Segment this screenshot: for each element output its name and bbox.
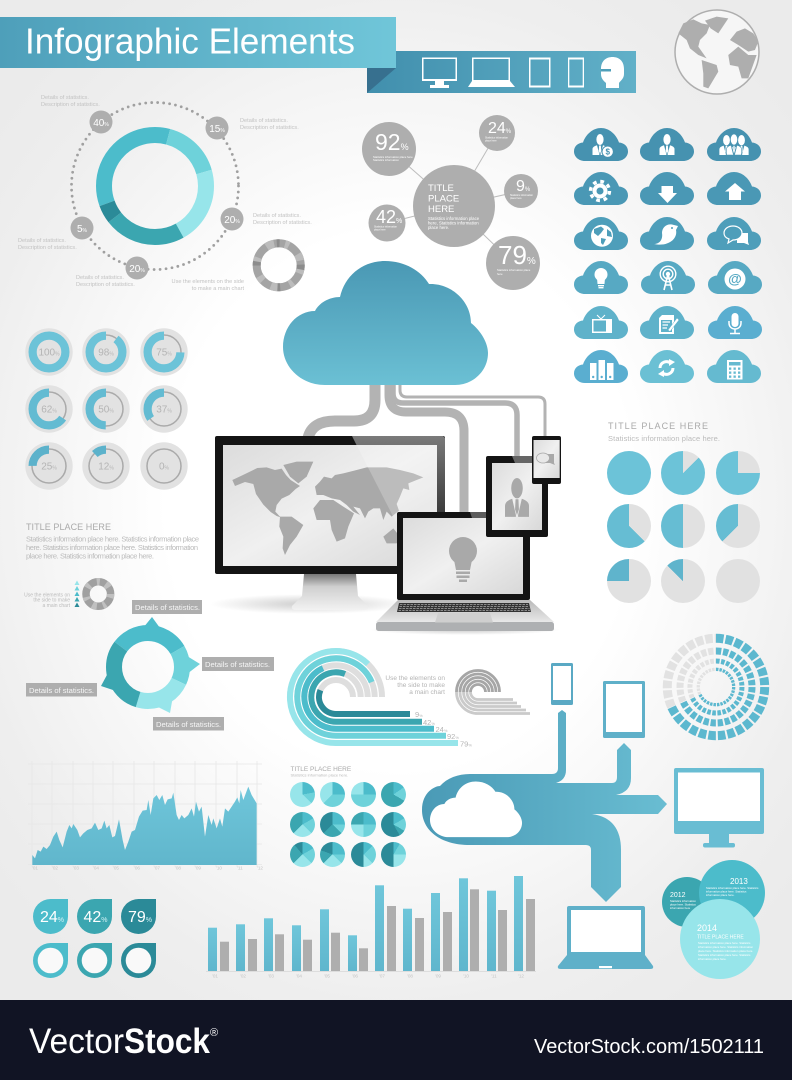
footer bar: Vector xyxy=(29,1022,124,1061)
bubble chart: here xyxy=(497,272,503,276)
light bulb icon xyxy=(449,537,477,582)
bar chart: '11 xyxy=(491,974,497,978)
small pies title: TITLE PLACE HERE xyxy=(290,766,352,773)
bubble chart: Statistics information xyxy=(485,136,509,140)
bubble chart: HERE xyxy=(428,204,454,215)
bubble chart: here, Statistics information xyxy=(428,220,479,226)
main donut chart with dotted ring: Description of statistics. xyxy=(18,245,77,251)
main donut chart with dotted ring: Details of statistics. xyxy=(41,95,89,101)
main donut chart with dotted ring: Description of statistics. xyxy=(240,125,299,131)
cloud: notes xyxy=(640,306,694,339)
progress ring 0: 0% xyxy=(159,462,170,472)
cloud: light bulb xyxy=(574,261,628,294)
cloud: at sign: @ xyxy=(728,270,742,286)
year circles: 2013 xyxy=(730,877,748,886)
cloud: calculator xyxy=(707,350,761,383)
bubble chart: place here xyxy=(374,228,386,232)
semicircular bar chart: 9% xyxy=(415,710,423,719)
small grey semicircle bars xyxy=(456,670,530,714)
world map xyxy=(232,462,423,555)
area chart: '06 xyxy=(134,866,140,870)
cloud: team xyxy=(707,128,761,161)
semicircular bar chart xyxy=(290,651,472,748)
bubble chart: 92% xyxy=(375,129,409,155)
desktop monitor xyxy=(210,436,445,614)
bar chart: '07 xyxy=(379,974,385,978)
progress ring 37 xyxy=(140,385,188,433)
bubble chart: TITLE xyxy=(428,183,454,194)
cloud: binders xyxy=(574,350,628,383)
footer bar: VectorStock.com/1502111 xyxy=(534,1036,764,1058)
main donut chart with dotted ring: 20% xyxy=(224,215,240,226)
bar chart: '10 xyxy=(463,974,469,978)
cloud: person with dollar xyxy=(574,128,628,161)
progress ring 25: 25% xyxy=(41,462,57,472)
bar chart: '02 xyxy=(240,974,246,978)
bubble chart: PLACE xyxy=(428,194,459,204)
cloud: upload arrow xyxy=(707,172,761,205)
year circles: Statistics information xyxy=(670,899,696,903)
bar chart: '03 xyxy=(268,974,274,978)
title: Infographic Elements xyxy=(25,20,355,62)
year circles: information place here. Statistics information xyxy=(698,945,753,949)
area chart: '04 xyxy=(93,866,99,870)
area chart: '11 xyxy=(237,866,243,870)
bubble chart: Statistics information xyxy=(373,158,399,162)
progress ring 25 xyxy=(25,442,73,490)
main donut chart with dotted ring: 40% xyxy=(93,118,109,129)
progress ring 100: 100% xyxy=(38,348,60,358)
main donut chart with dotted ring: Details of statistics. xyxy=(240,118,288,124)
main donut chart with dotted ring xyxy=(18,95,312,292)
bubble chart: Statistics information place here xyxy=(373,155,413,159)
bubble chart: 79% xyxy=(498,240,536,270)
progress ring 98 xyxy=(82,328,130,376)
outline laptop xyxy=(558,906,653,969)
white cloud xyxy=(430,782,522,837)
semicircular bar chart: the side to make xyxy=(397,682,445,689)
year circles: information place here. Statistics xyxy=(706,890,747,894)
progress ring 75 xyxy=(140,328,188,376)
small ring with triangles: a main chart xyxy=(42,603,71,609)
year circles: 2014 xyxy=(697,923,717,933)
year circles: Statistics information place here. Statistics xyxy=(698,953,751,957)
bar chart: '06 xyxy=(352,974,358,978)
main donut chart with dotted ring: to make a main chart xyxy=(192,286,244,292)
bar chart: '01 xyxy=(212,974,218,978)
cloud tree diagram xyxy=(422,710,667,902)
cloud: gear xyxy=(574,172,628,205)
cloud icon grid xyxy=(574,128,762,383)
main donut chart with dotted ring: Description of statistics. xyxy=(76,282,135,288)
semicircular bar chart: Use the elements on xyxy=(385,675,445,682)
pies title right xyxy=(608,421,720,443)
cloud: microphone xyxy=(708,306,762,339)
footer bar: Stock xyxy=(124,1022,210,1061)
progress ring 0 xyxy=(140,442,188,490)
area chart: '01 xyxy=(32,866,38,870)
progress ring 98: 98% xyxy=(98,348,114,358)
area chart: '10 xyxy=(216,866,222,870)
year circles: 2012 xyxy=(670,892,686,899)
year circles xyxy=(662,860,765,979)
outline tablet xyxy=(603,681,645,738)
small pies title: Statistics information place here. xyxy=(290,772,348,778)
semicircular bar chart: 79% xyxy=(460,740,472,748)
cloud: at sign xyxy=(708,261,762,294)
cloud: bird xyxy=(640,217,694,250)
year circles: information here xyxy=(670,906,691,910)
left text block xyxy=(26,522,199,560)
main donut chart with dotted ring: 5% xyxy=(77,224,88,235)
year circles: Statistics information place here. Statistics xyxy=(706,886,759,890)
outline phone xyxy=(551,663,573,705)
progress ring 100 xyxy=(25,328,73,376)
left text block: here. Statistics information place here. Statistics information xyxy=(26,543,198,552)
cloud: globe xyxy=(574,217,628,250)
progress ring 12 xyxy=(82,442,130,490)
bubble chart: place here. xyxy=(428,225,449,230)
main donut chart with dotted ring: Details of statistics. xyxy=(76,275,124,281)
teardrop badges xyxy=(33,899,156,978)
bar chart: '05 xyxy=(324,974,330,978)
main donut chart with dotted ring: Details of statistics. xyxy=(18,238,66,244)
small pie charts grid xyxy=(290,782,406,867)
left text block: TITLE PLACE HERE xyxy=(26,522,111,532)
main donut chart with dotted ring: Description of statistics. xyxy=(41,102,100,108)
progress ring 50: 50% xyxy=(98,404,114,416)
progress ring 62 xyxy=(25,385,73,433)
small pies title xyxy=(290,766,352,778)
progress ring 75: 75% xyxy=(156,348,172,358)
year circles: place here. Statistics information place here. xyxy=(698,949,753,953)
small ring with triangles xyxy=(24,580,111,609)
arrow donut with details: Details of statistics. xyxy=(205,660,270,669)
pies title right: Statistics information place here. xyxy=(608,434,720,443)
arrow donut with details: Details of statistics. xyxy=(156,720,221,729)
segmented radial chart xyxy=(667,638,765,736)
cloud: person xyxy=(640,128,694,161)
left text block: Statistics information place here. Statistics information place xyxy=(26,534,199,544)
progress ring 62: 62% xyxy=(41,404,57,416)
area chart: '05 xyxy=(113,866,119,870)
connectors from cloud to devices xyxy=(308,380,545,514)
semicircular bar chart: 42% xyxy=(423,718,435,727)
progress ring 50 xyxy=(82,385,130,433)
left text block: place here. Statistics information place here. xyxy=(26,552,154,560)
phone xyxy=(532,436,561,484)
main donut chart with dotted ring: 20% xyxy=(129,264,145,275)
cloud: person with dollar: $ xyxy=(605,148,610,157)
teardrop badges: 79% xyxy=(128,909,152,926)
bubble chart: 9% xyxy=(516,178,531,195)
arrow donut with details xyxy=(26,600,274,730)
cloud: chat bubbles xyxy=(707,217,761,250)
main donut chart with dotted ring: Use the elements on the side xyxy=(172,279,244,285)
small ring with triangles: Use the elements on xyxy=(24,592,70,598)
globe xyxy=(675,10,759,94)
area chart: '09 xyxy=(195,866,201,870)
arrow donut with details: Details of statistics. xyxy=(29,686,94,695)
outline monitor xyxy=(674,768,764,848)
bubble chart: Statistics information xyxy=(374,226,398,228)
progress ring 12: 12% xyxy=(98,462,114,472)
main donut chart with dotted ring: Description of statistics. xyxy=(253,220,312,226)
ribbon device icons xyxy=(422,57,624,88)
teardrop badges: 24% xyxy=(40,909,64,926)
bar chart: '08 xyxy=(407,974,413,978)
area chart xyxy=(28,761,263,870)
semicircular bar chart: 92% xyxy=(447,732,459,741)
progress rings grid xyxy=(25,328,188,490)
teardrop badges: 42% xyxy=(84,909,108,926)
main donut chart with dotted ring: 15% xyxy=(209,124,225,135)
year circles: information place here. xyxy=(706,893,735,897)
bubble chart: 42% xyxy=(376,207,402,227)
bar chart: '09 xyxy=(435,974,441,978)
bar chart xyxy=(206,876,536,978)
large pie charts grid xyxy=(607,451,760,603)
semicircular bar chart: a main chart xyxy=(409,689,445,696)
year circles: TITLE PLACE HERE xyxy=(697,934,744,940)
big cloud xyxy=(283,261,488,385)
bubble chart: 24% xyxy=(488,120,512,137)
bar chart: '04 xyxy=(296,974,302,978)
progress ring 37: 37% xyxy=(156,404,172,416)
area chart: '03 xyxy=(73,866,79,870)
cloud: refresh arrows xyxy=(640,350,694,383)
year circles: place here. Statistics xyxy=(670,902,696,906)
bubble chart: place here xyxy=(510,197,522,200)
laptop xyxy=(370,512,560,635)
area chart: '07 xyxy=(154,866,160,870)
area chart: '02 xyxy=(52,866,58,870)
small grey ring xyxy=(257,243,301,287)
arrow donut with details: Details of statistics. xyxy=(135,603,200,612)
bubble chart: place here xyxy=(485,140,497,142)
bubble chart xyxy=(362,115,540,290)
bubble chart: Statistics information place xyxy=(497,268,531,272)
year circles: information place here. xyxy=(698,957,727,961)
bar chart: '12 xyxy=(518,974,524,978)
year circles: Statistics information place here. Statistics xyxy=(698,941,751,945)
area chart: '08 xyxy=(175,866,181,870)
bubble chart: Statistics information xyxy=(510,194,534,197)
tablet xyxy=(486,456,548,537)
cloud: download arrow xyxy=(640,172,694,205)
footer bar xyxy=(0,1000,792,1080)
main donut chart with dotted ring: Details of statistics. xyxy=(253,213,301,219)
bubble chart: Statistics information place xyxy=(428,216,480,221)
cloud: television xyxy=(574,306,628,339)
area chart: '12 xyxy=(257,866,263,870)
small ring with triangles: the side to make xyxy=(33,598,70,604)
title ribbon xyxy=(0,17,636,93)
pies title right: TITLE PLACE HERE xyxy=(608,421,708,431)
cloud: antenna xyxy=(641,261,695,294)
footer bar: ® xyxy=(210,1027,218,1039)
semicircular bar chart: 24% xyxy=(436,725,448,734)
